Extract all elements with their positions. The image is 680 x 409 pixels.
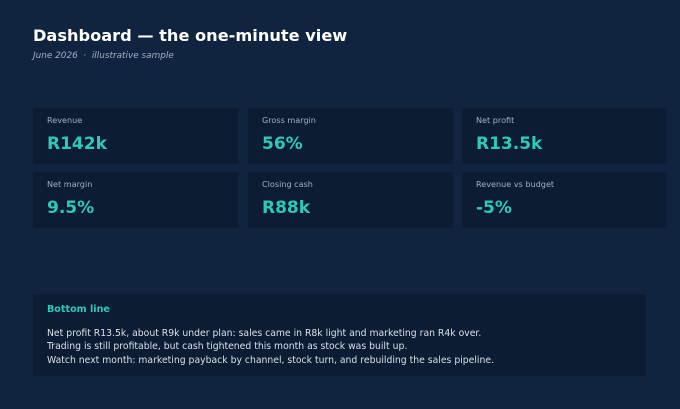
KPI card: net profit [462,108,667,164]
KPI card: revenue: R142k [47,134,107,154]
KPI card: gross margin: Gross margin [262,114,316,124]
panel: bottom line [33,294,646,376]
KPI card: net margin: Net margin [47,178,92,188]
KPI card: closing cash [248,172,453,228]
bottom line text: Trading is still profitable, but cash tightened this month as stock was built up. [47,341,407,352]
KPI card: net margin: 9.5% [47,198,94,218]
KPI card: net profit: Net profit [476,114,514,124]
KPI card: revenue vs budget: Revenue vs budget [476,178,554,188]
bottom line text: Net profit R13.5k, about R9k under plan: sales came in R8k light and marketing ran R4k over. [47,328,481,339]
KPI card: revenue vs budget: -5% [476,198,512,218]
KPI card: closing cash: R88k [262,198,310,218]
KPI card: revenue [33,108,238,164]
bottom line heading: Bottom line [47,304,110,314]
title: Dashboard — the one-minute view [33,26,347,45]
KPI card: revenue: Revenue [47,114,82,124]
KPI card: gross margin: 56% [262,134,303,154]
bottom line text [46,328,494,366]
KPI card: net profit: R13.5k [476,134,542,154]
subtitle: June 2026 · illustrative sample [33,51,174,61]
KPI card: revenue vs budget [462,172,667,228]
KPI card: closing cash: Closing cash [262,178,313,188]
KPI card: gross margin [248,108,453,164]
bottom line text: Watch next month: marketing payback by channel, stock turn, and rebuilding the sales pipeline. [47,355,494,366]
KPI card: net margin [33,172,238,228]
